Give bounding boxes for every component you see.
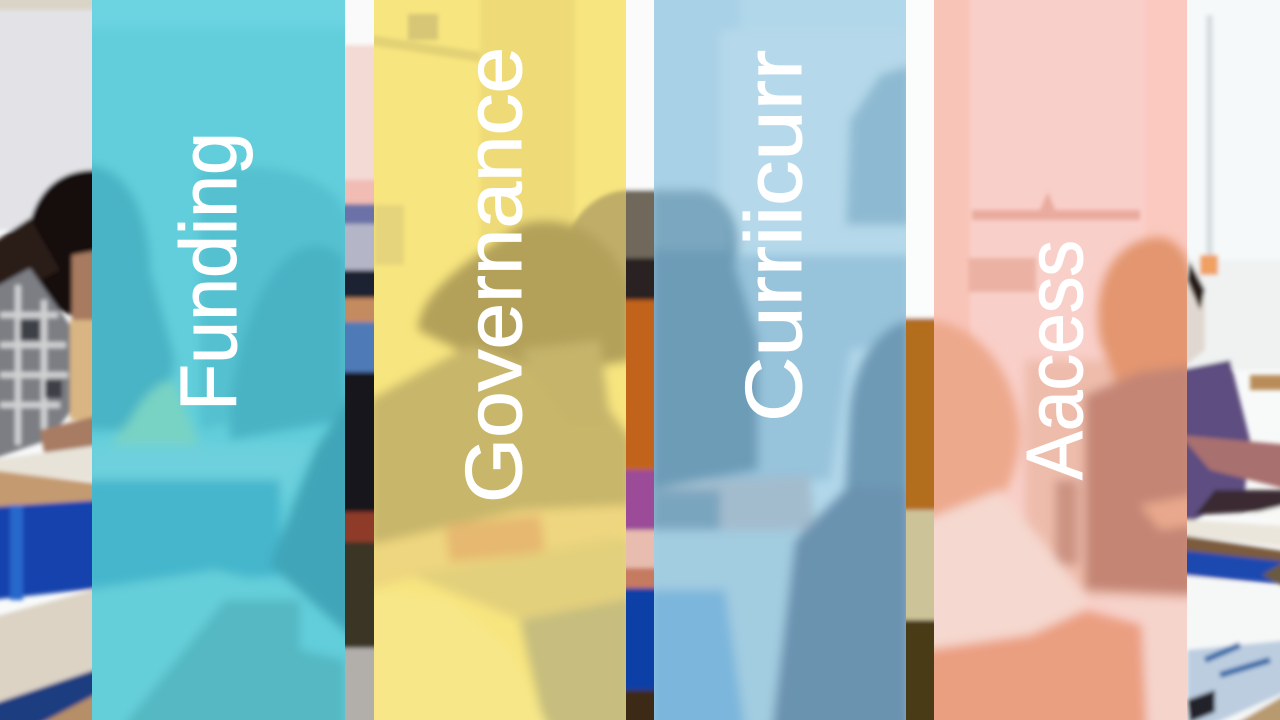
left wall <box>0 0 100 230</box>
right side scene <box>1160 0 1280 720</box>
panel: Curriculum <box>650 0 910 720</box>
blue band <box>650 0 910 720</box>
pink band <box>925 0 1195 720</box>
panel: Access <box>925 0 1195 720</box>
left student <box>0 170 100 460</box>
label: Access: Aacess <box>1010 240 1099 480</box>
panel: Governance <box>370 0 640 720</box>
panel: Funding <box>85 0 355 720</box>
gap column one <box>340 0 380 720</box>
label: Funding: Funding <box>164 132 253 411</box>
gap column two <box>620 0 660 720</box>
label: Curriculum: Curriicurr <box>729 50 818 422</box>
yellow band <box>370 0 640 720</box>
left desks <box>0 445 100 720</box>
label: Governance: Governance <box>449 47 538 503</box>
gap column three <box>900 0 940 720</box>
cyan band <box>85 0 355 720</box>
